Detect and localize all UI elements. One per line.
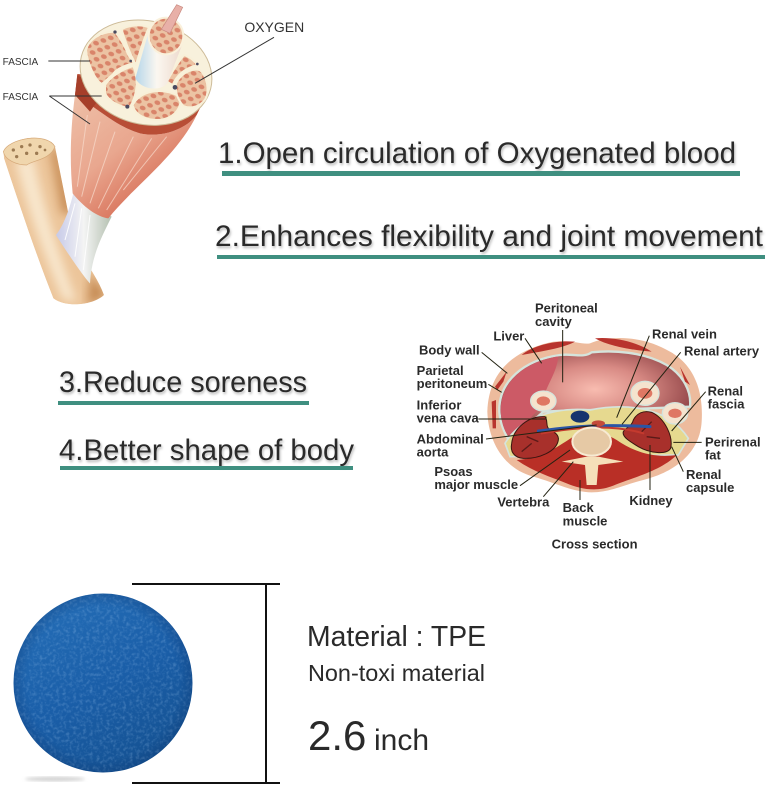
diagram labels: Parietal (417, 363, 464, 378)
diagram labels: Renal (686, 467, 721, 482)
bone cross-section (3, 138, 55, 165)
material note: Non-toxi material (308, 660, 485, 686)
anatomical illustration: muscle and fascia (3, 5, 304, 307)
label: oxygen: OXYGEN (244, 19, 304, 35)
label: fascia upper: FASCIA (3, 57, 39, 68)
diagram labels: peritoneum (417, 376, 487, 391)
retroperitoneal fat (505, 407, 688, 457)
benefit 1: 1.Open circulation of Oxygenated blood (218, 137, 736, 170)
diagram labels: Liver (493, 329, 524, 344)
diagram labels: muscle (563, 513, 607, 528)
diagram labels: fat (705, 448, 722, 463)
diagram labels: Cross section (552, 536, 638, 551)
kidneys (511, 412, 671, 458)
size value: inch (374, 724, 429, 757)
vena cava (571, 411, 589, 423)
vessels (538, 426, 650, 433)
cavity (499, 351, 690, 442)
label lines (48, 37, 274, 124)
diagram labels: Renal (708, 383, 743, 398)
organ bulges (531, 381, 688, 424)
material heading: Material : TPE (307, 621, 486, 653)
kidney interior detail (522, 422, 660, 452)
product: blue massage ball (14, 594, 192, 772)
wall muscles (492, 338, 690, 428)
diagram labels: Abdominal (417, 432, 484, 447)
diagram labels: fascia (708, 396, 745, 411)
anatomical illustration: abdominal cross section (417, 301, 761, 551)
diagram labels: major muscle (434, 477, 518, 492)
red muscle band (75, 74, 211, 135)
diagram labels: Vertebra (497, 495, 550, 510)
benefit 3: 3.Reduce soreness (59, 366, 307, 399)
aorta (592, 420, 605, 426)
diagram labels: aorta (417, 445, 449, 460)
body outline (487, 338, 702, 492)
diagram labels: Perirenal (705, 435, 761, 450)
size value: 2.6 (308, 712, 366, 759)
vertebra (562, 428, 623, 485)
benefit 2: 2.Enhances flexibility and joint movement (215, 220, 764, 253)
diagram labels: Psoas (434, 464, 473, 479)
tendon (56, 193, 112, 283)
diagram labels: cavity (535, 314, 573, 329)
diagram labels: Body wall (419, 343, 480, 358)
label: fascia lower: FASCIA (3, 92, 39, 103)
diagram labels: Back (563, 500, 594, 515)
diagram labels: Renal vein (652, 327, 717, 342)
muscle bundles (86, 25, 208, 120)
diagram labels: Renal artery (684, 344, 760, 359)
liver (501, 356, 558, 438)
diagram labels: vena cava (417, 410, 480, 425)
ball shadow (25, 776, 85, 782)
muscle end face (69, 6, 223, 139)
diagram labels: Inferior (417, 397, 461, 412)
size bracket (132, 584, 280, 783)
diagram labels: Peritoneal (535, 301, 598, 316)
lower muscle (517, 433, 677, 489)
diagram labels: capsule (686, 480, 734, 495)
benefit 4: 4.Better shape of body (59, 434, 354, 467)
pointer lines (478, 330, 706, 500)
connective tissue spots (113, 30, 199, 109)
diagram labels: Kidney (629, 493, 673, 508)
bone (3, 138, 107, 307)
muscle belly (71, 95, 197, 218)
diagram labels (417, 301, 761, 551)
central fibre bundle (135, 5, 183, 89)
